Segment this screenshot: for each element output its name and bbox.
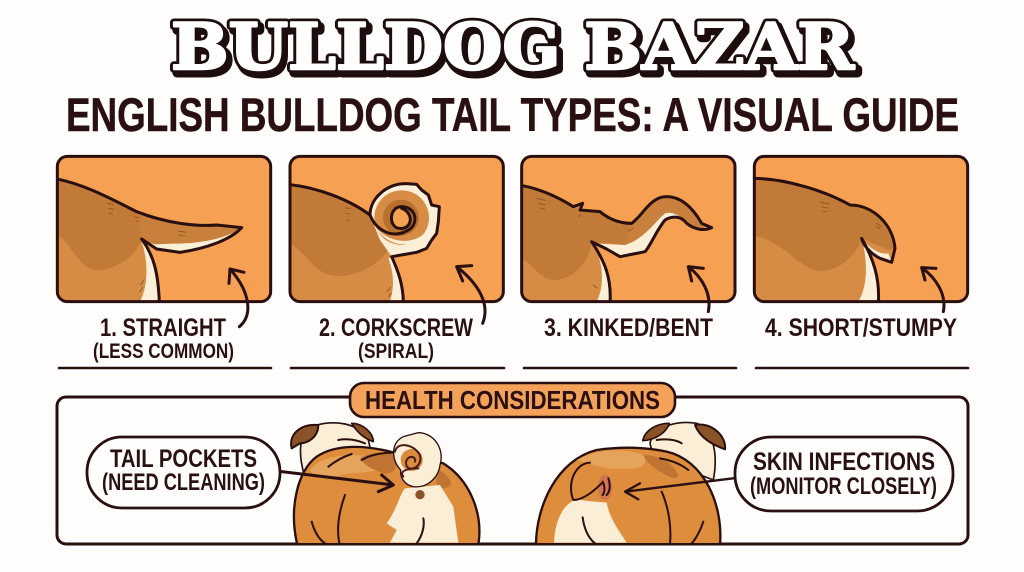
panel: corkscrew tail (287, 156, 503, 323)
label: corkscrew: 2. CORKSCREW (319, 314, 473, 342)
panel: straight tail (53, 156, 271, 327)
arrow: corkscrew (457, 266, 485, 323)
underlines (59, 367, 968, 369)
callout: skin infections (735, 437, 953, 511)
panel: kinked tail (518, 156, 735, 312)
heading pill: health considerations: HEALTH CONSIDERATIONS (365, 385, 660, 415)
arrow: short (922, 268, 944, 312)
panel: short tail (752, 156, 968, 312)
callout: skin infections: SKIN INFECTIONS (753, 448, 935, 476)
title: BULLDOG BAZAR (171, 10, 855, 85)
label: corkscrew: (SPIRAL) (358, 340, 434, 363)
label: kinked: 3. KINKED/BENT (544, 314, 713, 342)
callout: tail pockets (87, 437, 280, 508)
arrow: tail pockets (282, 472, 393, 492)
callout: tail pockets: (NEED CLEANING) (102, 469, 265, 496)
label: short: 4. SHORT/STUMPY (765, 314, 957, 342)
callout: skin infections: (MONITOR CLOSELY) (750, 473, 937, 500)
arrow: skin infections (625, 478, 733, 499)
callout: tail pockets: TAIL POCKETS (110, 445, 257, 473)
label: straight: 1. STRAIGHT (100, 314, 226, 342)
panel: health considerations (57, 397, 968, 544)
illustration: dog with short tail (536, 422, 733, 545)
illustration: dog with corkscrew tail (282, 423, 479, 545)
arrow: straight (229, 269, 248, 327)
title: BULLDOG BAZAR (174, 14, 858, 89)
label: straight: (LESS COMMON) (93, 340, 234, 363)
label: straight (93, 314, 234, 363)
label: corkscrew (319, 314, 473, 363)
title: BULLDOG BAZAR (171, 10, 855, 85)
arrow: kinked (688, 267, 709, 312)
